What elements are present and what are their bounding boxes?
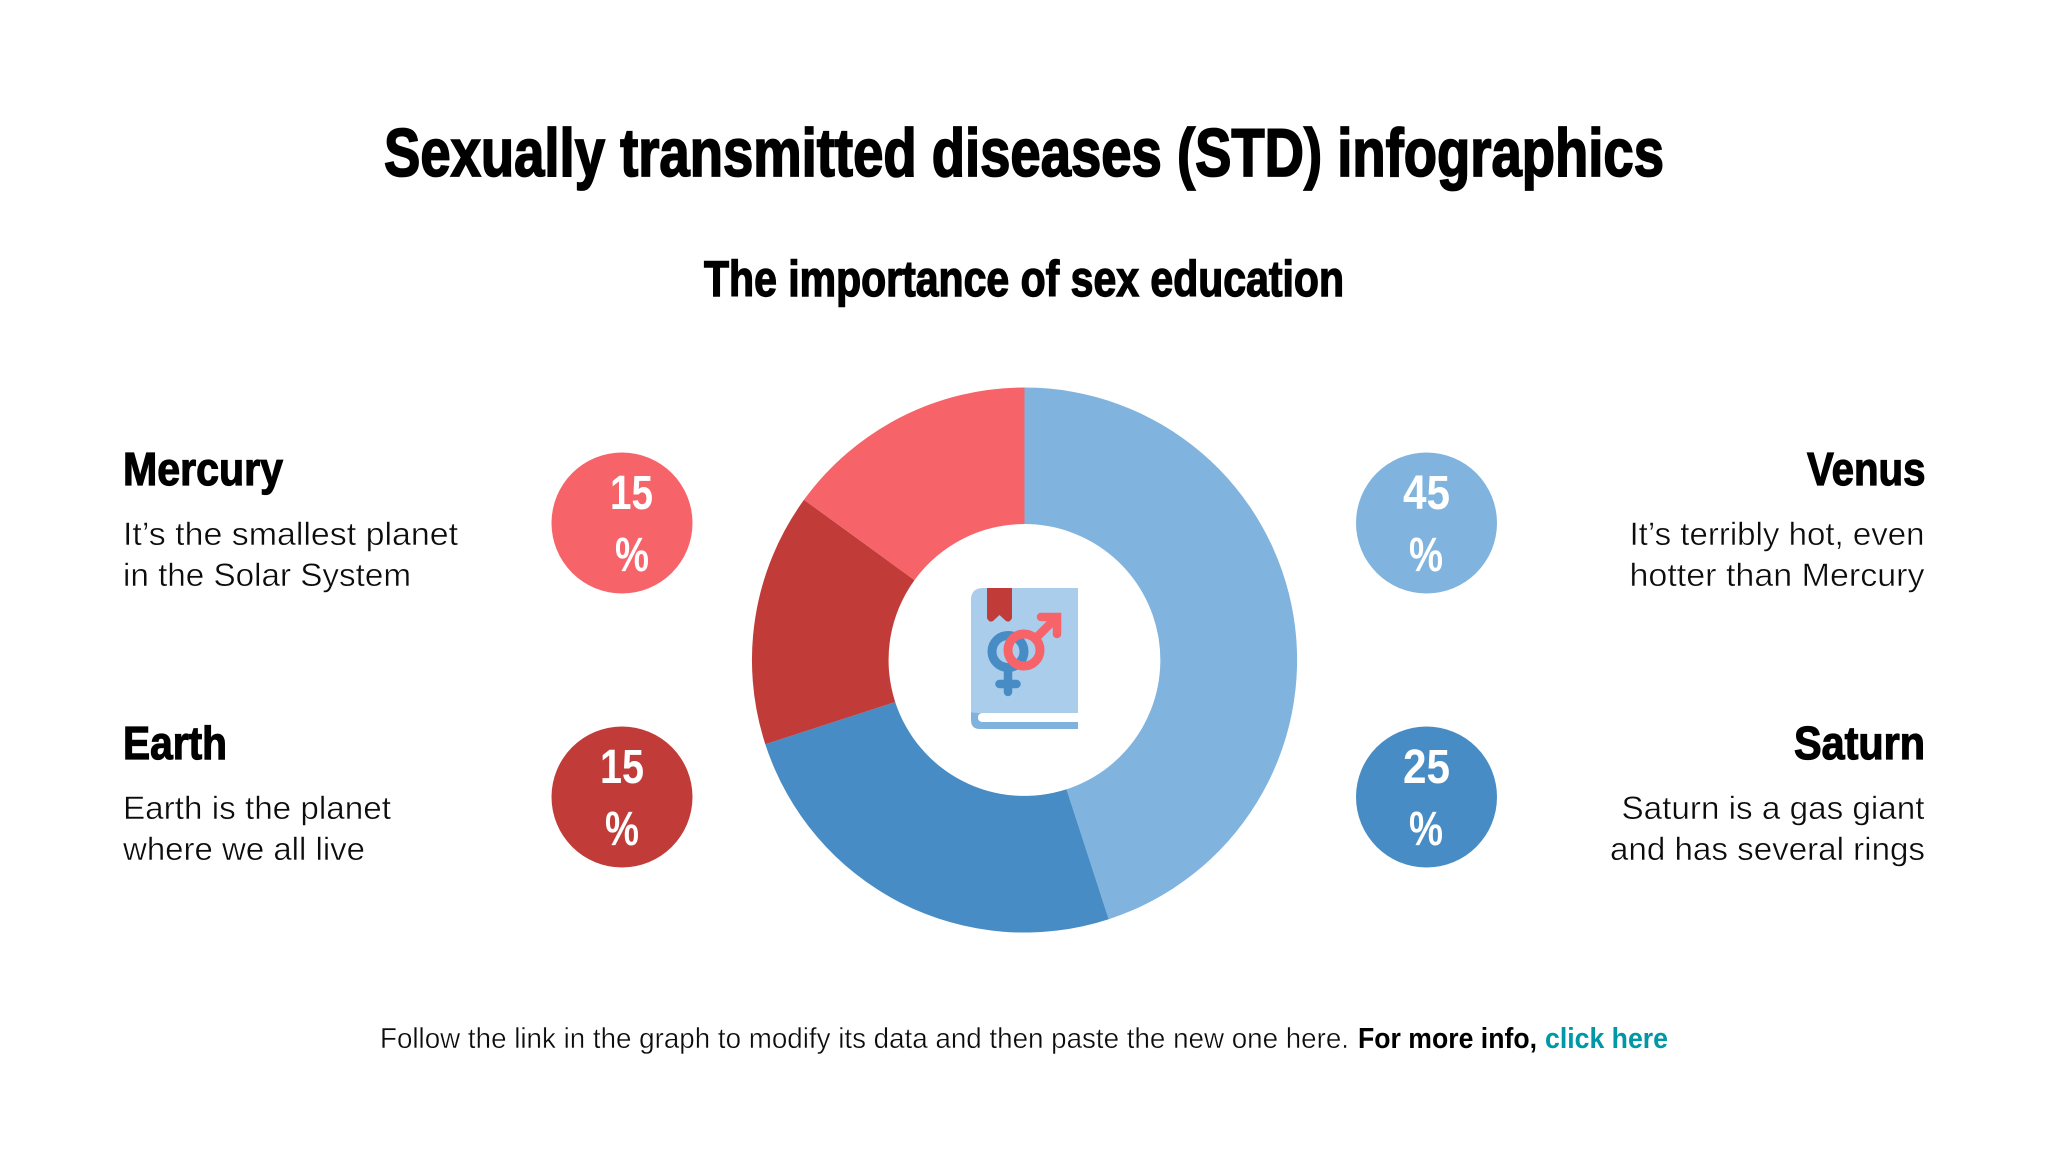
heading: Mercury: Mercury	[123, 443, 283, 495]
badge: 25%: %	[1409, 803, 1443, 856]
icon: book with gender symbols	[971, 588, 1078, 729]
subtitle: The importance of sex education	[704, 251, 1344, 307]
text: Saturn description: and has several rings	[1610, 831, 1925, 867]
text: Saturn description	[1610, 790, 1925, 867]
text: Mercury description	[123, 516, 458, 593]
text: Venus description: It’s terribly hot, even	[1630, 516, 1924, 552]
footer note: Follow the link in the graph to modify its data and then paste the new one here.	[380, 1023, 1349, 1055]
badge: 15%: 15	[600, 741, 644, 794]
badge: 15%: %	[605, 803, 639, 856]
badge: 25%: 25	[1403, 741, 1450, 794]
text: Venus description	[1630, 516, 1924, 593]
text: Earth description: where we all live	[122, 831, 365, 867]
heading: Earth: Earth	[123, 717, 227, 769]
badge: 45%	[1356, 452, 1497, 594]
heading: Venus: Venus	[1807, 443, 1926, 495]
text: Earth description: Earth is the planet	[123, 790, 391, 826]
slice: Saturn 25%	[765, 702, 1109, 933]
donut chart	[752, 387, 1297, 933]
footer note: click here	[1545, 1023, 1668, 1055]
text: Mercury description: in the Solar System	[123, 557, 411, 593]
text: Saturn description: Saturn is a gas giant	[1622, 790, 1925, 826]
text: Earth description	[122, 790, 391, 867]
heading: Saturn: Saturn	[1794, 717, 1925, 769]
text: Venus description: hotter than Mercury	[1630, 557, 1924, 593]
text: Mercury description: It’s the smallest planet	[123, 516, 458, 552]
panel: Mercury	[123, 443, 692, 594]
footer note: For more info,	[1358, 1023, 1537, 1055]
panel: Venus	[1356, 443, 1926, 594]
badge: 45%: %	[1409, 529, 1443, 582]
title: Sexually transmitted diseases (STD) infographics	[384, 115, 1664, 191]
panel: Earth	[122, 717, 693, 868]
badge: 15%	[552, 726, 692, 868]
badge: 45%: 45	[1403, 467, 1450, 520]
panel: Saturn	[1356, 717, 1925, 868]
slice: Earth 15%	[752, 500, 914, 744]
slice: Venus 45%	[1024, 387, 1297, 919]
badge: 25%	[1356, 726, 1497, 868]
badge: 15%	[552, 452, 692, 594]
badge: 15%: 15	[610, 467, 653, 520]
badge: 15%: %	[615, 529, 649, 582]
slice: Mercury 15%	[804, 387, 1024, 580]
